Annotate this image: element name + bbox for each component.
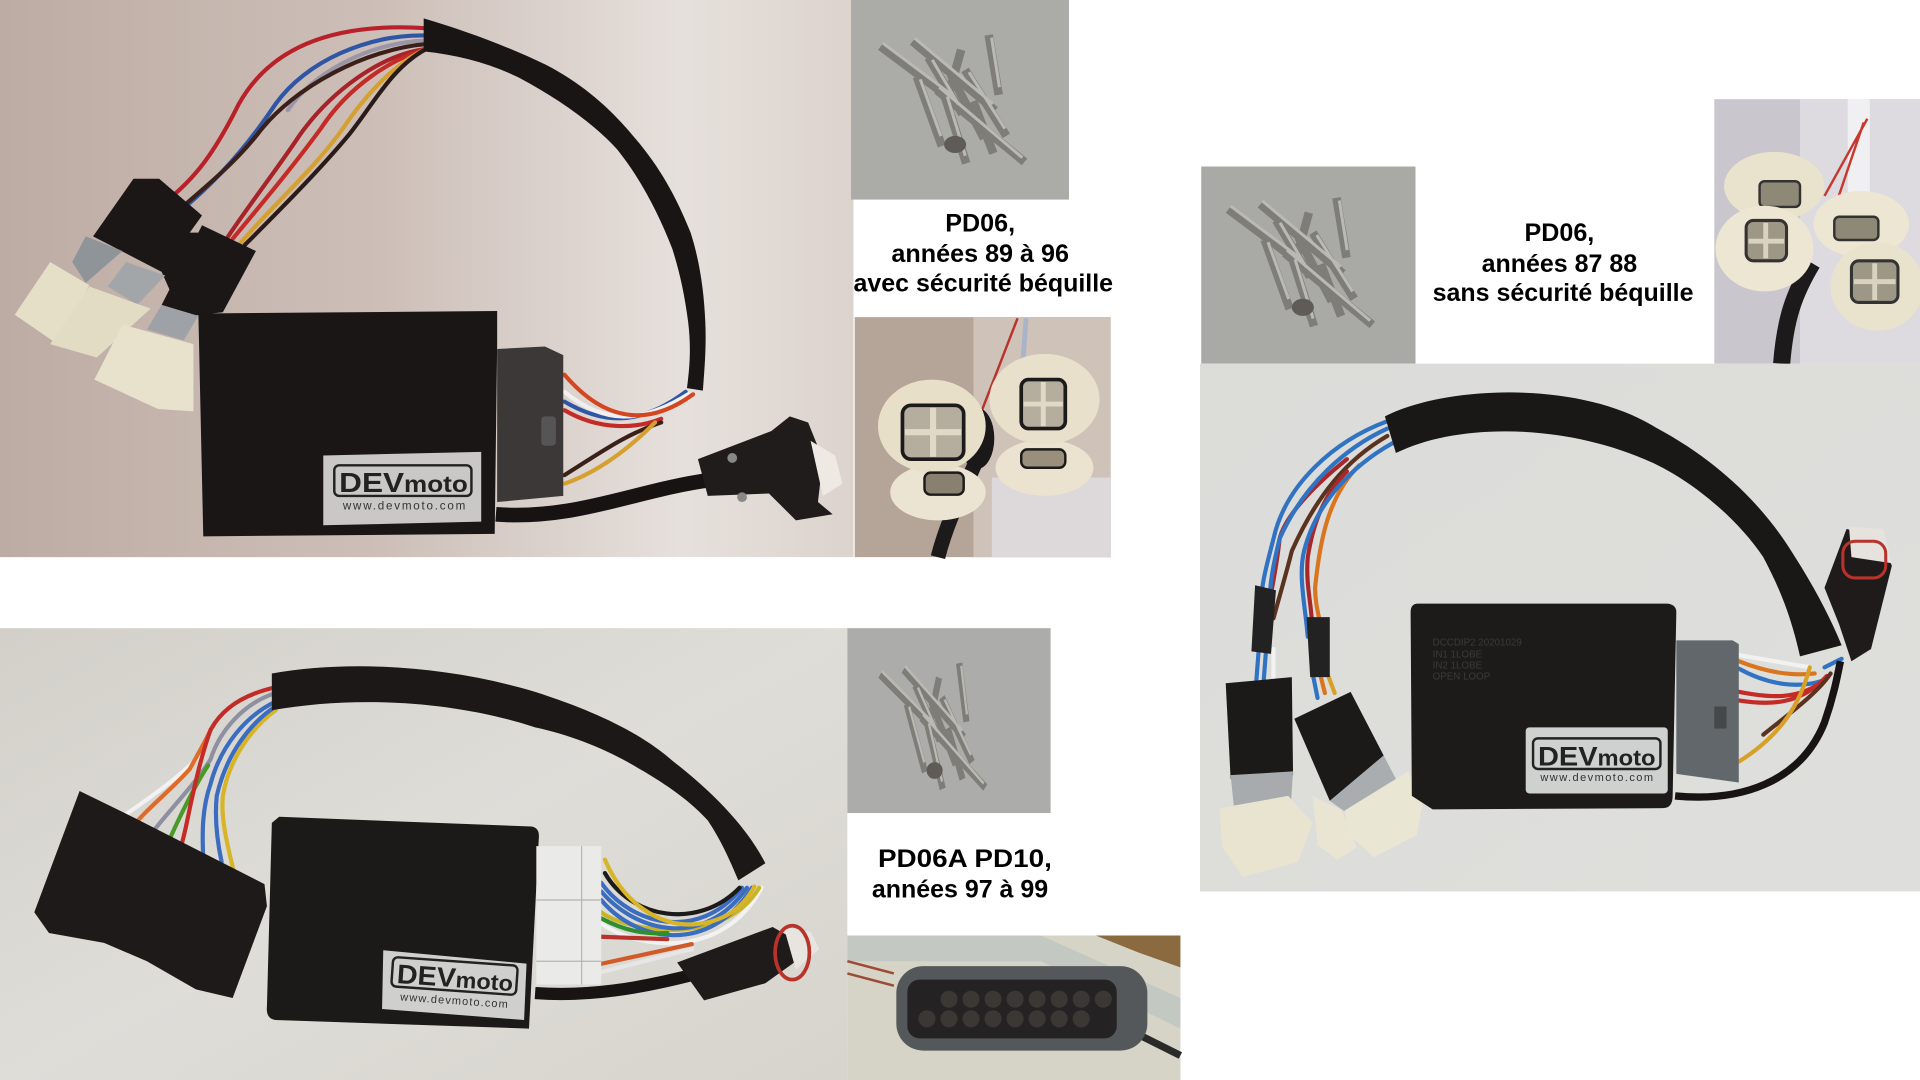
caption: PD06 89-96 [853, 209, 1113, 297]
caption: PD06 89-96: avec sécurité béquille [853, 269, 1113, 297]
caption: PD06 87-88 [1433, 219, 1694, 307]
control unit box: OPEN LOOP [1433, 672, 1491, 683]
DB9 connector and cable [1675, 527, 1892, 797]
caption: PD06A PD10: années 97 à 99 [872, 876, 1048, 904]
wire harness [165, 27, 693, 484]
DEVmoto label [1526, 727, 1668, 793]
DEVmoto label: www.devmoto.com [1539, 772, 1653, 784]
black sheathed cable [1385, 392, 1842, 656]
image: 16-pin connector [847, 936, 1180, 1080]
multi-pin connector block [34, 791, 267, 998]
DEVmoto label: DEVmoto [396, 959, 514, 997]
caption: PD06 89-96: PD06, [945, 209, 1015, 237]
control unit box [198, 311, 563, 536]
wire harness [115, 688, 762, 973]
caption: PD06 87-88: années 87 88 [1482, 250, 1637, 278]
control unit box: DCCDIP2 20201029 [1433, 637, 1522, 648]
black sheathed cable [272, 666, 765, 880]
image: terminals thumbnail PD06 87-88 [1201, 167, 1416, 364]
panel: PD06 87-88 module photo [1200, 364, 1920, 891]
control unit box: IN1 1LOBE [1433, 650, 1483, 661]
control unit box: IN2 1LOBE [1433, 661, 1483, 672]
DEVmoto label [323, 452, 481, 525]
DEVmoto label: www.devmoto.com [399, 991, 508, 1011]
panel: PD06A PD10 module photo [0, 628, 847, 1080]
caption: PD06A PD10 [872, 845, 1052, 904]
image: terminals thumbnail PD06 89-96 [851, 0, 1069, 200]
DEVmoto label: www.devmoto.com [342, 499, 465, 512]
caption: PD06 89-96: années 89 à 96 [891, 240, 1069, 268]
four-way connectors [15, 179, 256, 411]
DEVmoto label: DEV moto [339, 467, 468, 498]
DEVmoto label: DEVmoto [1538, 741, 1656, 771]
caption: PD06 87-88: PD06, [1524, 219, 1594, 247]
image: harness connectors with stand safety [855, 317, 1111, 557]
black sheathed cable [424, 18, 706, 391]
image: harness connectors without stand safety [1714, 99, 1920, 364]
control unit box [1411, 604, 1739, 809]
four-way connectors [1220, 585, 1423, 877]
DB9 connector and cable [496, 416, 842, 520]
image: terminals thumbnail PD06A [847, 628, 1051, 813]
caption: PD06 87-88: sans sécurité béquille [1433, 279, 1694, 307]
DEVmoto label [382, 950, 527, 1020]
caption: PD06A PD10: PD06A PD10, [878, 845, 1052, 873]
control unit box [267, 817, 601, 1029]
panel: PD06 89-96 module photo [0, 0, 853, 557]
wire harness [1256, 421, 1842, 762]
DB9 connector and cable [535, 926, 819, 1000]
